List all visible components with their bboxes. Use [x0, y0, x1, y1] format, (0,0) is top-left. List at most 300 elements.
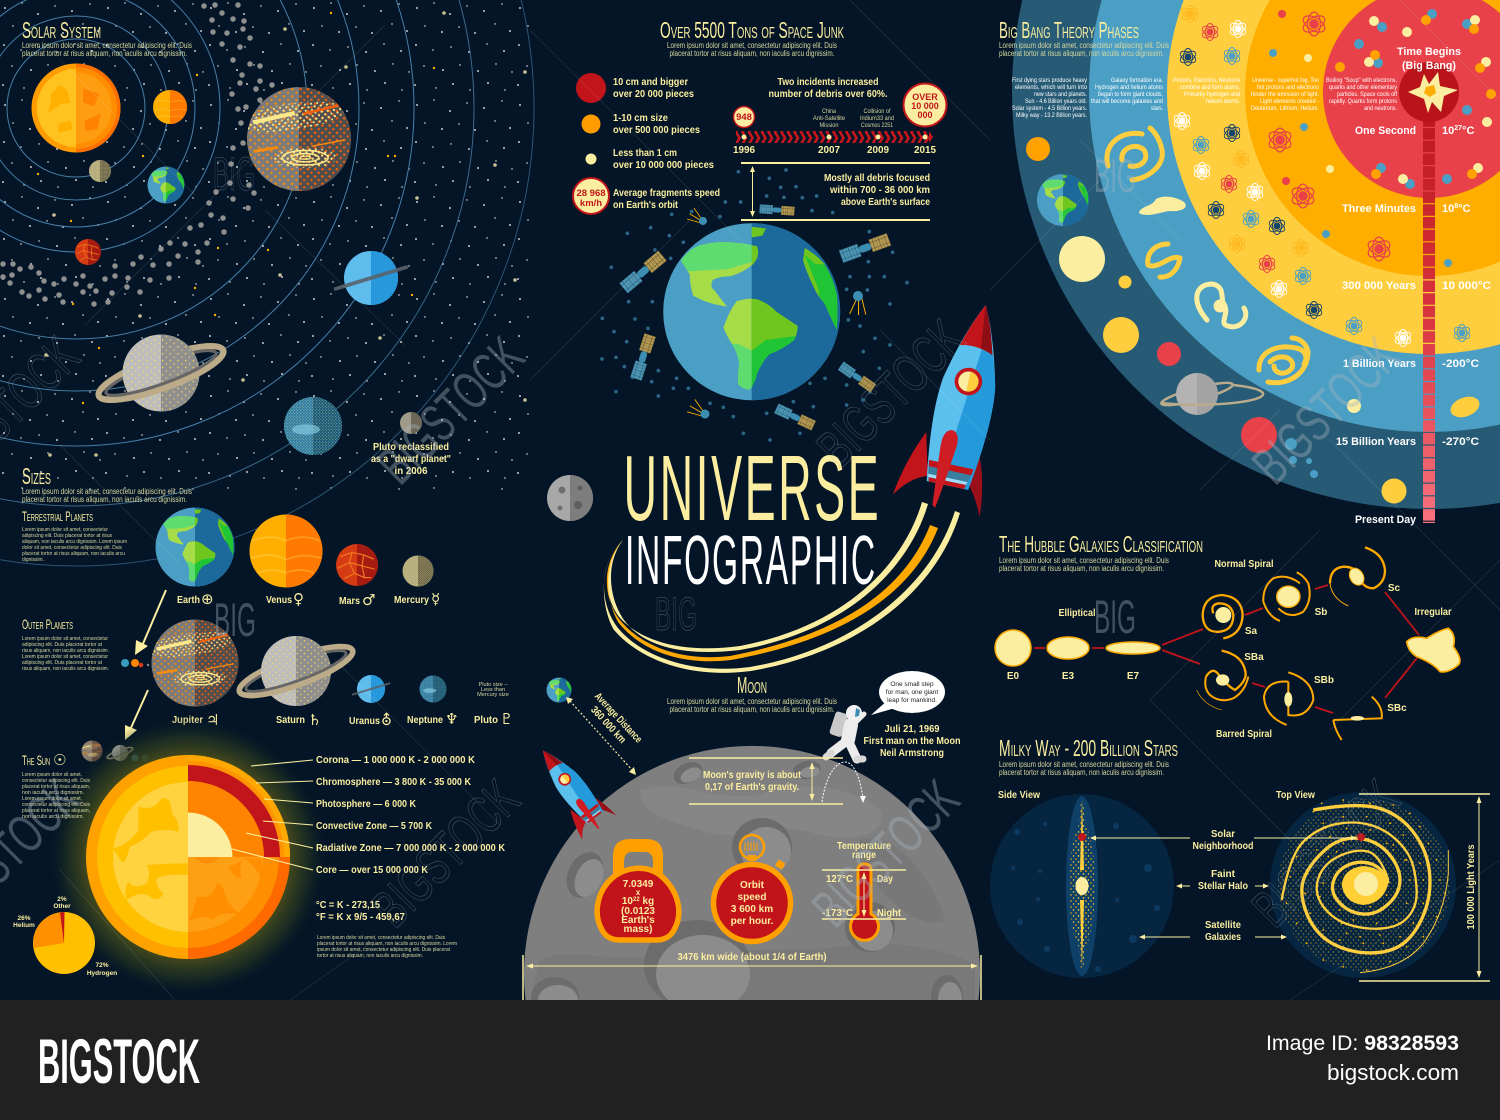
stopwatch: orbit speed: speed [738, 892, 766, 903]
galaxy labels [1007, 559, 1452, 740]
phase text: stars and planets: First dying stars produce heavy [1012, 77, 1088, 84]
watermark: bigstock: BIG [655, 587, 697, 640]
outer ring planets and stars [1026, 137, 1406, 504]
phase text: atoms form: combine and form atoms. [1180, 84, 1240, 91]
rocket: large [892, 294, 1023, 517]
text: moon description [667, 697, 837, 714]
pie chart: sun composition: 26% [17, 915, 31, 922]
label: mercury [394, 590, 440, 608]
heading: solar system: Solar System [22, 17, 101, 43]
pie chart: sun composition: Other [53, 903, 71, 910]
text: temperature formulas: °C = K - 273,15 [316, 899, 380, 911]
watermark: bigstock: BIGSTOCK [801, 769, 971, 938]
label: mars [339, 591, 375, 609]
phase text: superhot fog: hot protons and electrons [1257, 84, 1319, 91]
callout: pluto reclassified: in 2006 [394, 465, 428, 477]
text: terrestrial planets description: aliquam, non iaculis arcu dignissim. Lorem ipsum [22, 539, 127, 545]
planet: jupiter [145, 620, 238, 706]
timeline labels: 300 000 Years [1342, 280, 1416, 292]
footer bar [0, 1000, 1500, 1120]
label: venus: ♀ [293, 590, 304, 608]
label: time begins [1397, 46, 1461, 72]
text: milky way description: placerat tortor at risus aliquam, non iaculis arcu dignissim. [999, 768, 1164, 777]
legend: debris sizes: 10 cm and bigger [613, 76, 688, 88]
planet: uranus orbit [333, 251, 409, 305]
sun layer labels: Radiative Zone — 7 000 000 K - 2 000 000 K [316, 842, 505, 854]
planet: sun [32, 64, 120, 152]
text: solar system description: Lorem ipsum dolor sit amet, consectetur adipiscing elit. Duis [22, 41, 192, 50]
label: pluto: Pluto [474, 714, 498, 726]
labels: views: Side View [998, 789, 1041, 801]
thermometer: temperature range: 127°C [826, 873, 853, 885]
label: jupiter [172, 711, 219, 729]
label: earth: Earth [177, 594, 200, 606]
legend: debris sizes: over 500 000 pieces [613, 124, 700, 136]
label: satellite galaxies: Satellite [1205, 919, 1241, 931]
speech bubble [871, 671, 945, 715]
weight: moon mass: Earth's [621, 915, 655, 926]
stopwatch: orbit speed [714, 835, 790, 942]
heading: the sun: The Sun [22, 752, 50, 768]
galaxy labels: Elliptical [1058, 608, 1096, 619]
barred galaxy: SBa [1197, 651, 1248, 710]
heading: milky way: Milky Way - 200 Billion Stars [999, 735, 1178, 761]
label: venus [266, 590, 304, 608]
galaxy labels: Irregular [1414, 607, 1452, 618]
pie chart: sun composition [13, 896, 117, 977]
text: sizes description: placerat tortor at risus aliquam, non iaculis arcu dignissim. [22, 495, 187, 504]
text: solar system description [22, 41, 192, 58]
dashed distance arrow [566, 697, 636, 775]
text: terrestrial planets description: adipiscing elit. Duis placerat tortor at risus [22, 533, 112, 539]
text: temperature formulas [316, 899, 405, 923]
legend: debris sizes: 28 968 [576, 188, 606, 199]
galaxy labels: Normal Spiral [1214, 559, 1274, 570]
small earth [546, 678, 572, 702]
text: terrestrial planets description: dignissim. [22, 557, 44, 563]
timeline: debris incidents [733, 76, 946, 156]
note: pluto size: Mercury size [477, 692, 509, 698]
label: jupiter: ♃ [206, 711, 219, 729]
timeline: debris incidents: 000 [917, 110, 933, 120]
galaxy labels: Barred Spiral [1216, 729, 1272, 740]
phase text: stars and planets: Sun - 4.6 Billion years old. [1025, 98, 1087, 105]
timeline: debris incidents: OVER [912, 92, 938, 102]
label: saturn [276, 711, 321, 729]
label: mercury: ☿ [431, 590, 440, 608]
debris field [602, 170, 907, 440]
label: solar neighborhood: Solar [1211, 828, 1235, 840]
text: temperature formulas: °F = K x 9/5 - 459,67 [316, 911, 405, 923]
sun layer labels: Chromosphere — 3 800 K - 35 000 K [316, 776, 471, 788]
planet: mercury [402, 556, 434, 586]
planet: venus orbit [153, 90, 187, 124]
label: mars: ♂ [362, 591, 375, 609]
callout: pluto reclassified: as a "dwarf planet" [371, 453, 451, 465]
label: uranus [349, 711, 392, 729]
timeline: debris incidents: 2015 [914, 144, 936, 156]
label: neptune [407, 710, 458, 728]
label: average distance [588, 690, 644, 746]
barred galaxy: SBb [1264, 672, 1313, 725]
text: sizes description [22, 487, 192, 504]
callout: debris altitude: above Earth's surface [841, 196, 930, 208]
text: the sun description: non iaculis arcu dignissim. [22, 814, 84, 820]
moon: small decorative [547, 475, 593, 521]
text: outer planets description [22, 636, 109, 672]
pie chart: sun composition: 72% [95, 962, 109, 969]
title: universe infographic: INFOGRAPHIC [625, 520, 877, 599]
thermometer: temperature range: -173°C [822, 907, 853, 919]
dimension: 100 000 light years [1359, 794, 1490, 981]
labels: views: Top View [1276, 789, 1316, 801]
galaxy labels: SBa [1244, 652, 1264, 663]
mini outer planets [80, 740, 148, 762]
text: outer planets description: adipiscing elit. Duis placerat tortor at [22, 660, 102, 666]
speech bubble: for man, one giant [886, 689, 938, 696]
phase text: boiling soup: particles. Space cools off [1337, 91, 1397, 98]
stopwatch: orbit speed: 3 600 km [731, 904, 773, 915]
text: first man on the moon: Neil Armstrong [880, 747, 944, 759]
moon surface [524, 746, 980, 1019]
heading: moon: Moon [737, 672, 767, 698]
irregular galaxy [1407, 628, 1460, 672]
panel: hubble galaxies [995, 531, 1460, 740]
planet: mars [336, 544, 378, 586]
arrows: milky way labels [1090, 836, 1357, 940]
label: average distance: Average Distance [592, 690, 644, 746]
heading: terrestrial planets: Terrestrial Planets [22, 508, 93, 524]
text: space junk description: placerat tortor at risus aliquam, non iaculis arcu dignissim. [670, 49, 834, 58]
label: saturn: Saturn [276, 714, 305, 726]
speech bubble: One small step [890, 681, 934, 688]
watermark: bigstock: BIG [214, 593, 256, 646]
temperature labels: -270°C [1442, 436, 1479, 448]
text: big bang description [999, 41, 1169, 58]
text: the sun description: consectetur adipiscing elit. Duis [22, 778, 90, 784]
callout: debris altitude: within 700 - 36 000 km [829, 184, 930, 196]
label: average distance: 360 000 km [588, 704, 628, 746]
footer image id: Image ID: 98328593 [1266, 1032, 1459, 1055]
timeline bar [1423, 90, 1435, 523]
galaxy labels: E7 [1127, 671, 1140, 682]
callout: debris altitude [741, 163, 930, 220]
weight: moon mass: kg [640, 896, 654, 907]
connectors [1034, 585, 1419, 713]
temperature labels: 10 [1442, 125, 1454, 137]
note: pluto size [477, 682, 509, 698]
text: moon description: Lorem ipsum dolor sit amet, consectetur adipiscing elit. Duis [667, 697, 837, 706]
pie chart: sun composition: Helium [13, 922, 35, 929]
panel: space junk [573, 17, 946, 440]
text: outer planets description: Lorem ipsum dolor sit amet, consectetur [22, 636, 108, 642]
label: satellite galaxies [1205, 919, 1241, 943]
text: first man on the moon: First man on the Moon [864, 735, 960, 747]
phase text: galaxy formation: began to form giant clouds, [1098, 91, 1163, 98]
phase text: superhot fog: Deuterium, Lithium, Helium. [1251, 105, 1319, 112]
phase text: stars and planets: Milky way - 13.2 Billion years. [1016, 112, 1087, 119]
spiral galaxy: Sc [1330, 547, 1385, 606]
text: terrestrial planets description: placerat tortor at risus aliquam, non iaculis arcu [22, 551, 125, 557]
weight: moon mass: x [636, 888, 641, 897]
sun layer labels: Photosphere — 6 000 K [316, 798, 416, 810]
callout: moon gravity [689, 758, 866, 804]
pie chart: sun composition: Hydrogen [87, 970, 117, 977]
galaxies in blue ring [1107, 128, 1482, 421]
watermark: bigstock: BIGSTOCK [361, 769, 531, 938]
planet: saturn [235, 636, 357, 706]
timeline: debris incidents: number of debris over 60%. [768, 88, 888, 100]
swoosh trail [604, 502, 960, 673]
galaxy labels: E3 [1062, 671, 1075, 682]
phase text: galaxy formation: that will become galaxies and [1091, 98, 1163, 105]
callout: moon gravity: 0,17 of Earth's gravity. [705, 781, 799, 793]
text: first man on the moon: Juli 21, 1969 [884, 723, 940, 735]
weight: moon mass: (0.0123 [621, 906, 655, 917]
text: outer planets description: risus aliquam, non iaculis arcu dignissim. [22, 666, 109, 672]
timeline labels: 15 Billion Years [1336, 436, 1416, 448]
note: pluto size: Less than [481, 687, 505, 693]
phase text: boiling soup [1326, 77, 1398, 112]
title: universe infographic: UNIVERSE [624, 435, 881, 540]
label: venus: Venus [266, 594, 292, 606]
timeline labels: One Second [1355, 125, 1416, 137]
timeline labels: 1 Billion Years [1343, 358, 1416, 370]
heading: big bang: Big Bang Theory Phases [999, 17, 1139, 43]
label: mars: Mars [339, 595, 360, 607]
label: faint stellar halo: Faint [1211, 868, 1235, 880]
note: pluto size: Pluto size – [479, 682, 508, 688]
phase text: boiling soup: quarks and other elementary [1329, 84, 1398, 91]
panel: milky way [990, 735, 1490, 981]
stopwatch: orbit speed: Orbit [740, 880, 765, 891]
label: saturn: ♄ [308, 711, 321, 729]
text: hubble description: placerat tortor at risus aliquam, non iaculis arcu dignissim. [999, 564, 1164, 573]
temperature labels: °C [1462, 125, 1474, 137]
timeline labels: Three Minutes [1342, 203, 1416, 215]
arrow: jupiter to sun scale [125, 690, 148, 740]
dimension: 100 000 light years: 100 000 Light Years [1465, 844, 1477, 930]
weight: moon mass: mass) [624, 924, 652, 935]
phase text: boiling soup: rapidly. Quarks form protons [1329, 98, 1397, 105]
label: faint stellar halo [1198, 868, 1248, 892]
legend: debris sizes: over 20 000 pieces [613, 88, 694, 100]
label: pluto [474, 710, 513, 728]
label: pluto: ♇ [500, 710, 513, 728]
watermark: bigstock: BIG [1094, 590, 1136, 643]
concentric phase rings [1012, 0, 1500, 509]
text: the sun description: non iaculis arcu dignissim. [22, 790, 84, 796]
label: uranus: ⛢ [381, 711, 392, 729]
galaxy: top view [1270, 792, 1456, 978]
text: moon description: placerat tortor at risus aliquam, non iaculis arcu dignissim. [670, 705, 834, 714]
timeline: debris incidents: 2009 [867, 144, 889, 156]
phase text: superhot fog: hinder the emission of light. [1251, 91, 1319, 98]
legend: debris sizes: km/h [580, 198, 602, 209]
phase text: galaxy formation: Hydrogen and helium atoms [1095, 84, 1163, 91]
temperature labels [1442, 125, 1491, 448]
sun glow [46, 715, 330, 999]
planet: neptune orbit [284, 397, 342, 455]
text: the sun description: placerat tortor at risus aliquam, [22, 808, 90, 814]
label: solar neighborhood: Neighborhood [1192, 840, 1254, 852]
sun layer labels: Convective Zone — 5 700 K [316, 820, 432, 832]
astronaut [826, 705, 864, 759]
text: sun footnote: placerat tortor at risus aliquam, non iaculis arcu dignissim. Lorem [317, 941, 457, 947]
heading: the sun: ☉ [53, 751, 66, 769]
label: time begins: (Big Bang) [1402, 60, 1456, 72]
footer website: bigstock.com [1327, 1060, 1459, 1085]
rocket: small [524, 740, 616, 841]
timeline: debris incidents: 2007 [818, 144, 840, 156]
spiral galaxy: Sa [1203, 595, 1243, 638]
label: satellite galaxies: Galaxies [1205, 931, 1241, 943]
dimension: moon width: 3476 km wide (about 1/4 of Earth) [678, 951, 826, 963]
stopwatch: orbit speed: per hour. [731, 916, 774, 927]
temperature labels: 10 [1442, 203, 1454, 215]
label: mercury: Mercury [394, 594, 429, 606]
text: sizes description: Lorem ipsum dolor sit amet, consectetur adipiscing elit. Duis [22, 487, 192, 496]
text: the sun description: Lorem ipsum dolor sit amet, [22, 796, 82, 802]
barred galaxy: SBc [1333, 697, 1382, 740]
callout: pluto reclassified [371, 441, 451, 477]
watermark: bigstock: BIGSTOCK [1241, 326, 1411, 495]
legend: debris sizes: Less than 1 cm [613, 147, 677, 159]
planet: pluto orbit [400, 412, 422, 434]
timeline: debris incidents: Anti-Satellite [813, 115, 845, 122]
temperature labels: 8 [1454, 203, 1458, 210]
particles [1269, 9, 1496, 267]
planet: venus [250, 514, 322, 588]
galaxy labels: Sa [1245, 626, 1258, 637]
text: solar system description: placerat tortor at risus aliquam, non iaculis arcu dignissim. [22, 49, 187, 58]
text: the sun description [22, 772, 90, 820]
planet: mercury orbit [89, 160, 111, 182]
sun layer callout lines [232, 760, 313, 870]
sun layer labels: Corona — 1 000 000 K - 2 000 000 K [316, 754, 475, 766]
text: outer planets description: Lorem ipsum dolor sit amet, consectetur [22, 654, 108, 660]
text: big bang description: Lorem ipsum dolor sit amet, consectetur adipiscing elit. Duis [999, 41, 1169, 50]
temperature labels: -200°C [1442, 358, 1479, 370]
thermometer: temperature range: Temperature [837, 840, 891, 852]
legend: debris sizes: Average fragments speed [613, 187, 720, 199]
timeline labels: Present Day [1355, 514, 1417, 526]
text: the sun description: Lorem ipsum dolor sit amet, [22, 772, 82, 778]
timeline: debris incidents: Cosmos 2251 [861, 122, 893, 129]
temperature labels: 10 000°C [1442, 280, 1491, 292]
timeline: debris incidents: Two incidents increased [778, 76, 878, 88]
text: first man on the moon [864, 723, 960, 759]
phase text: galaxy formation [1091, 77, 1163, 112]
galaxy labels: Sb [1315, 607, 1327, 618]
thermometer: temperature range [822, 840, 906, 940]
text: milky way description [999, 760, 1169, 777]
phase text: atoms form [1173, 77, 1240, 105]
timeline: debris incidents: 948 [736, 112, 752, 123]
legend: debris sizes: on Earth's orbit [613, 199, 678, 211]
text: space junk description: Lorem ipsum dolor sit amet, consectetur adipiscing elit. Duis [667, 41, 837, 50]
phase text: galaxy formation: Galaxy formation era. [1111, 77, 1163, 84]
planet: neptune [420, 676, 446, 702]
timeline labels [1336, 125, 1417, 526]
panel: big bang phases [999, 0, 1500, 526]
text: milky way description: Lorem ipsum dolor sit amet, consectetur adipiscing elit. Duis [999, 760, 1169, 769]
heading: hubble: The Hubble Galaxies Classification [999, 531, 1203, 557]
label: solar neighborhood [1192, 828, 1254, 852]
label: neptune: Neptune [407, 714, 443, 726]
satellites [620, 204, 891, 430]
phase text: stars and planets: Solar system - 4.5 Billion years. [1012, 105, 1087, 112]
planet: saturn orbit [94, 334, 228, 412]
planet: mars orbit [75, 239, 101, 265]
weight: moon mass: 7.0349 [623, 879, 654, 890]
temperature labels: 27 [1454, 125, 1462, 132]
galaxy labels: SBc [1387, 703, 1407, 714]
heading: space junk: Over 5500 Tons of Space Junk [660, 17, 844, 43]
watermark: bigstock: BIG [1094, 149, 1136, 202]
phase text: superhot fog [1251, 77, 1319, 112]
phase text: atoms form: Protons, Electrons, Neutrons [1173, 77, 1240, 84]
speech bubble: leap for mankind. [887, 697, 937, 704]
phase text: atoms form: helium atoms. [1206, 98, 1240, 105]
timeline: debris incidents: China [822, 108, 836, 115]
labels: views [998, 789, 1316, 801]
label: earth [177, 590, 214, 608]
planet: earth with debris [663, 223, 840, 400]
text: sun footnote: tortor at risus aliquam, non iaculis arcu dignissim. [317, 953, 423, 959]
timeline: debris incidents: 1996 [733, 144, 755, 156]
pie chart: sun composition: 2% [57, 896, 67, 903]
callout: debris altitude: Mostly all debris focused [824, 172, 930, 184]
galaxy labels: SBb [1314, 675, 1334, 686]
watermark: bigstock: BIGSTOCK [806, 309, 976, 478]
label: uranus: Uranus [349, 715, 380, 727]
legend: debris sizes: over 10 000 000 pieces [613, 159, 714, 171]
label: earth: ⊕ [201, 590, 214, 608]
watermark: bigstock: BIGSTOCK [1241, 769, 1411, 938]
phase text: superhot fog: Light elements created - [1260, 98, 1319, 105]
panel: sizes [22, 463, 513, 762]
sun layer labels: Core — over 15 000 000 K [316, 864, 428, 876]
sun layer labels [316, 754, 505, 876]
callout: moon gravity: Moon's gravity is about [703, 769, 801, 781]
thermometer: temperature range: Night [877, 907, 901, 919]
phase text: boiling soup: and neutrons. [1364, 105, 1397, 112]
text: terrestrial planets description [22, 527, 127, 563]
text: terrestrial planets description: Lorem ipsum dolor sit amet, consectetur [22, 527, 108, 533]
thermometer: temperature range: range [852, 849, 876, 861]
planet: uranus [351, 675, 391, 703]
watermark: bigstock: BIGSTOCK [366, 326, 536, 495]
timeline: debris incidents: 10 000 [911, 101, 939, 111]
weight: moon mass [597, 839, 679, 940]
dimension: moon width [523, 951, 981, 1000]
timeline: debris incidents: Collision of [864, 108, 891, 115]
spiral galaxy: Sb [1263, 572, 1310, 621]
text: outer planets description: adipiscing elit. Duis placerat tortor at [22, 642, 102, 648]
label: jupiter: Jupiter [172, 714, 203, 726]
phase text: boiling soup: Boiling "Soup" with electrons, [1326, 77, 1397, 84]
sun cross-section [86, 755, 290, 959]
galaxy labels: Sc [1388, 583, 1401, 594]
text: sun footnote: Lorem ipsum dolor sit amet, consectetur adipiscing elit. Duis [317, 935, 445, 941]
text: the sun description: placerat tortor at risus aliquam, [22, 784, 90, 790]
galaxy labels: E0 [1007, 671, 1020, 682]
panel: the sun [13, 715, 505, 999]
text: the sun description: consectetur adipiscing elit. Duis [22, 802, 90, 808]
planet: earth orbit [148, 166, 184, 204]
phase text: stars and planets: new stars and planets. [1034, 91, 1087, 98]
